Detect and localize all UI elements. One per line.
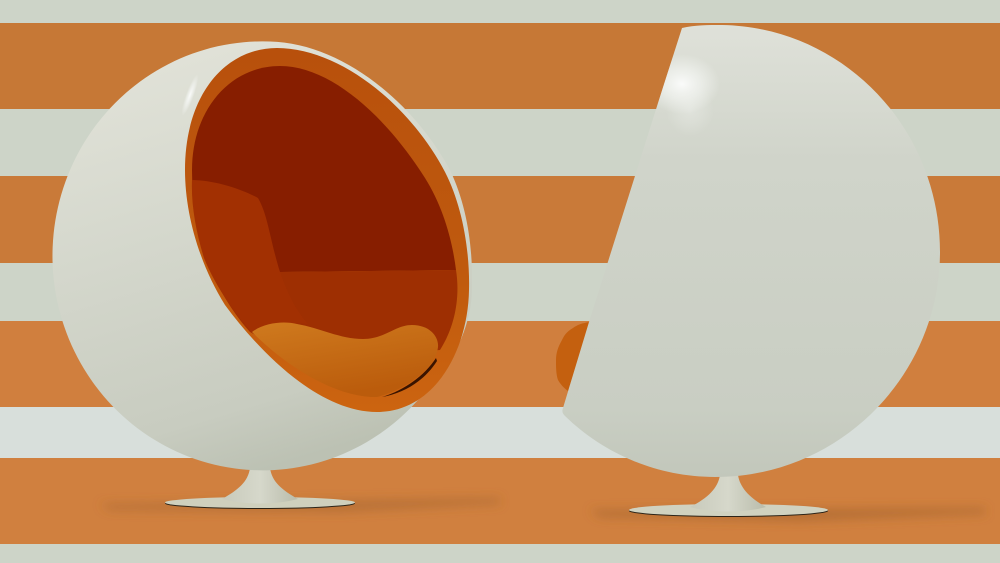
floor shadows <box>100 498 985 521</box>
left chair seat cushion <box>252 323 438 397</box>
right chair base <box>629 475 828 517</box>
left chair base <box>165 468 355 509</box>
right chair seat peek <box>556 322 590 391</box>
left chair <box>52 41 472 509</box>
left chair highlight <box>179 73 201 117</box>
left chair back cushion <box>206 258 457 360</box>
left chair side cushion <box>192 180 308 332</box>
left chair seat gap shadow <box>382 358 437 397</box>
right chair shell <box>562 25 940 477</box>
left chair shell rim <box>185 48 469 412</box>
right chair <box>556 25 940 517</box>
left chair interior <box>192 66 456 272</box>
right chair highlight <box>658 58 712 120</box>
left chair shell <box>52 41 472 470</box>
